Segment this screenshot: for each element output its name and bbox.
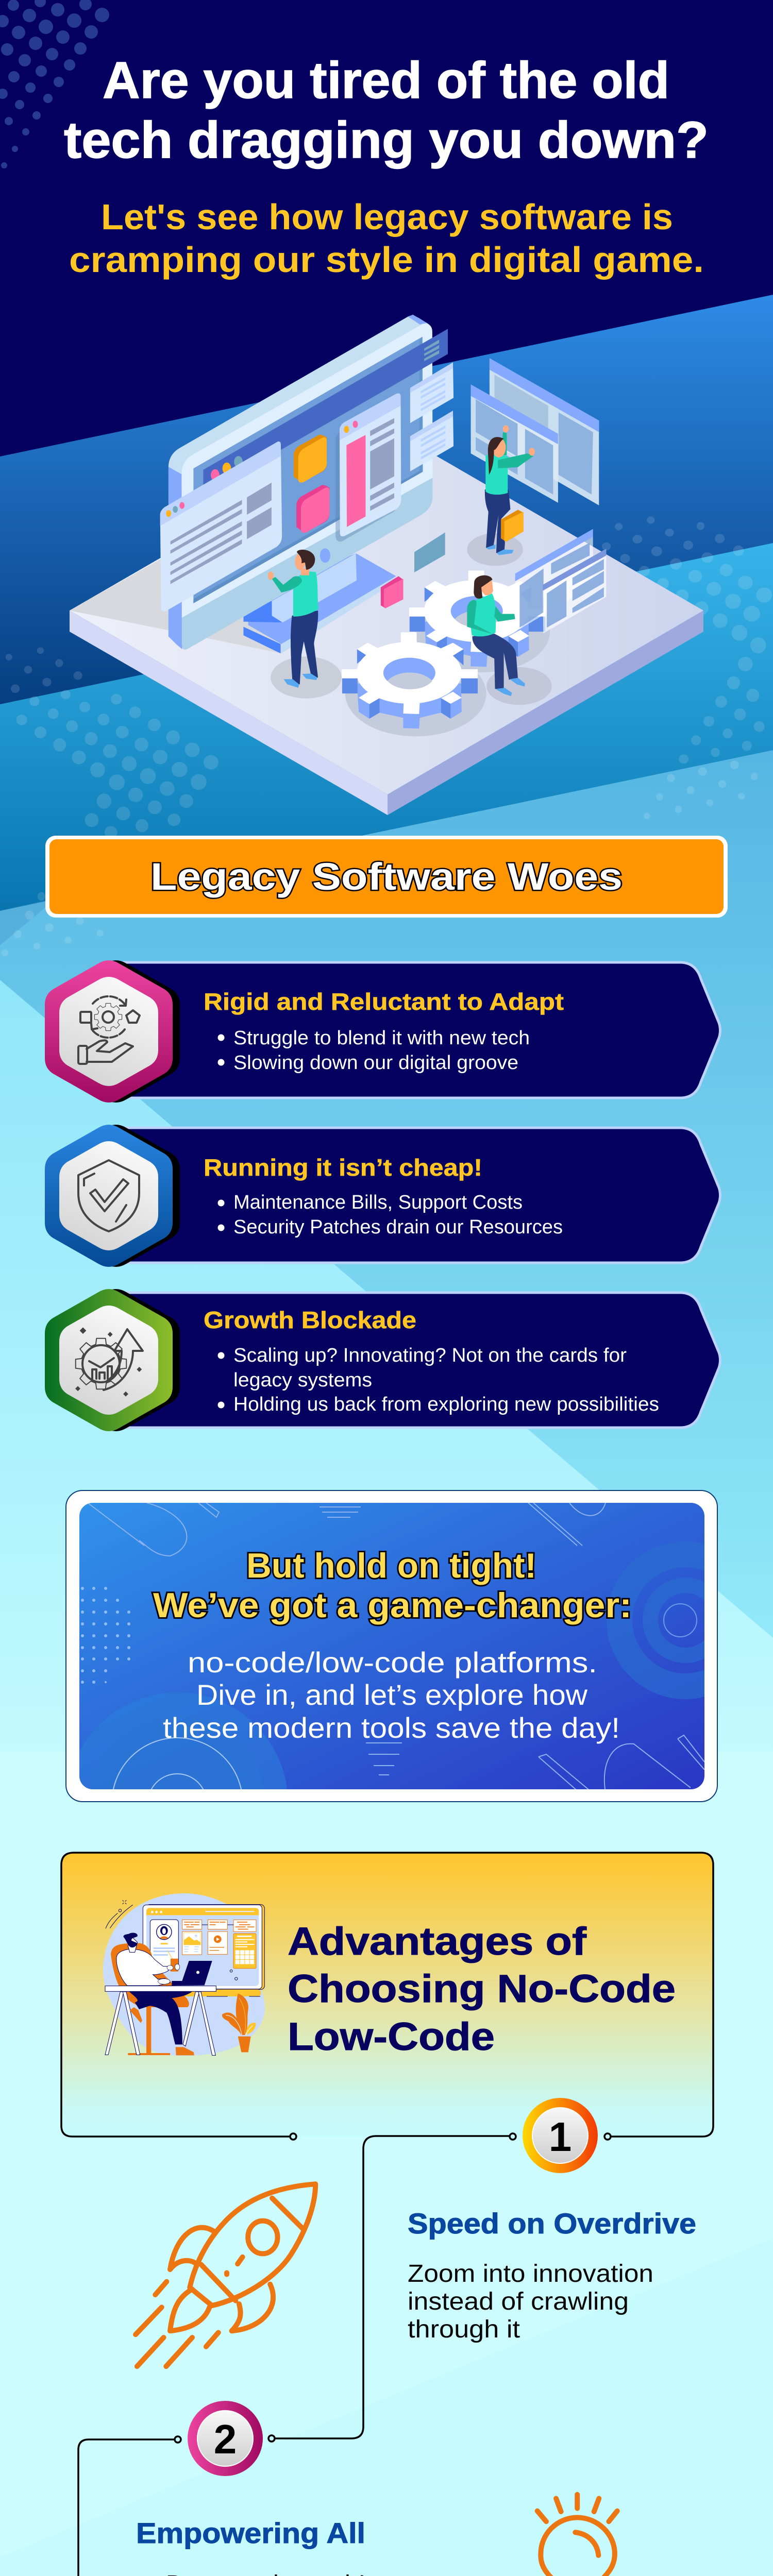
text: card 2: Maintenance Bills, Support Costs — [233, 1192, 523, 1213]
icon: hexagon with growth gear — [45, 1289, 180, 1431]
standing man — [268, 548, 342, 699]
number badge 1 — [523, 2098, 598, 2173]
text: step 1: through it — [408, 2316, 520, 2343]
title: tech dragging you down? — [64, 111, 709, 169]
section banner: Legacy Software Woes: Legacy Software Woes — [150, 855, 623, 898]
callout body — [163, 1646, 620, 1744]
subtitle — [69, 197, 704, 280]
callout heading — [153, 1546, 632, 1625]
pattern: top left dots — [0, 0, 109, 168]
background: navy top section — [0, 0, 773, 927]
callout body: no-code/low-code platforms. — [188, 1646, 597, 1679]
text: card 3: legacy systems — [233, 1369, 372, 1391]
monitor with app windows — [160, 315, 453, 650]
callout body: Dive in, and let’s explore how — [196, 1679, 588, 1711]
illustration: developer at desk — [103, 1893, 265, 2056]
background: soft diagonal facets — [0, 898, 773, 2576]
text: card 2 — [204, 1154, 563, 1238]
text: card 3: Growth Blockade — [204, 1307, 416, 1333]
panel: Running it isn't cheap — [45, 1125, 720, 1267]
seated woman with floating windows — [467, 529, 606, 705]
standing woman — [467, 425, 535, 566]
text: card 1: Rigid and Reluctant to Adapt — [204, 988, 564, 1015]
heading: advantages — [288, 1920, 676, 2059]
connector lines: step path — [57, 2133, 716, 2576]
icon: hexagon with shield — [45, 1125, 180, 1267]
step 2: empowering all — [136, 2401, 630, 2576]
title — [64, 52, 709, 169]
floor tiles — [381, 532, 445, 608]
panel: game-changer callout — [65, 1490, 718, 1802]
step 1: speed on overdrive — [136, 2098, 696, 2366]
background: teal blue diagonal band — [0, 543, 773, 927]
panel: Rigid and Reluctant to Adapt — [45, 960, 720, 1103]
callout decoration — [66, 1503, 751, 1914]
text: card 2: Security Patches drain our Resources — [233, 1216, 563, 1238]
icon: rocket — [136, 2184, 315, 2366]
text: card 1 — [204, 988, 564, 1074]
platform — [70, 427, 703, 815]
number badge 2 — [188, 2401, 263, 2476]
icon: light bulb in hand — [491, 2495, 630, 2576]
number badge 2: 2 — [214, 2416, 237, 2462]
text: card 3 — [204, 1307, 659, 1415]
panel: Growth Blockade — [45, 1289, 720, 1431]
title: Are you tired of the old — [103, 52, 669, 109]
callout heading: We’ve got a game-changer: — [153, 1586, 632, 1625]
hero illustration: isometric software platform — [70, 315, 703, 815]
text: card 1: Struggle to blend it with new tech — [233, 1027, 530, 1049]
heading: advantages: Low-Code — [288, 2015, 495, 2059]
monitor stand — [243, 553, 396, 653]
text: step 1: Speed on Overdrive — [408, 2207, 696, 2240]
gears — [342, 570, 550, 736]
callout body: these modern tools save the day! — [163, 1711, 620, 1744]
callout heading: But hold on tight! — [246, 1546, 536, 1585]
text: card 3: Scaling up? Innovating? Not on the cards for — [233, 1345, 627, 1366]
heading: advantages: Advantages of — [288, 1920, 587, 1963]
icon: hexagon with gear on hand — [45, 960, 180, 1103]
number badge 1: 1 — [549, 2114, 572, 2160]
text: card 3: Holding us back from exploring new possibilities — [233, 1394, 659, 1415]
text: step 1 — [408, 2207, 696, 2343]
text: step 1: Zoom into innovation — [408, 2260, 653, 2287]
pattern: dots around platform — [2, 517, 772, 956]
text: step 1: instead of crawling — [408, 2288, 629, 2315]
text: step 2: Empowering All — [136, 2517, 365, 2549]
text: card 2: Running it isn’t cheap! — [204, 1154, 482, 1181]
section banner: Legacy Software Woes — [45, 836, 728, 918]
heading: advantages: Choosing No-Code — [288, 1967, 676, 2011]
text: step 2 — [136, 2517, 365, 2576]
subtitle: cramping our style in digital game. — [69, 240, 704, 280]
background: bright blue diagonal band — [0, 295, 773, 732]
floating windows behind woman — [471, 358, 599, 505]
background: sky blue diagonal band — [0, 750, 773, 1700]
text: card 1: Slowing down our digital groove — [233, 1052, 518, 1074]
background: light cyan lower page — [0, 980, 773, 2576]
subtitle: Let's see how legacy software is — [101, 197, 673, 237]
panel: advantages header box — [61, 1853, 713, 2140]
